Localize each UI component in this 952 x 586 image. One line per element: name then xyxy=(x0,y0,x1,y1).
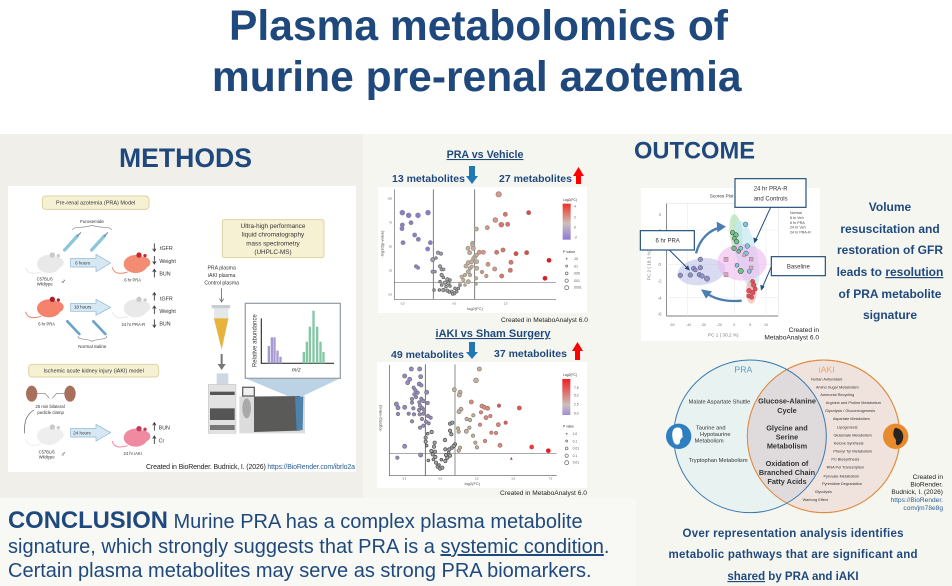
chart: volcano PRA vs Vehicle: 0.0 xyxy=(452,302,457,306)
chart: PCA scores plot: Normal xyxy=(790,211,802,215)
mouse row 2: 6 hr PRA xyxy=(38,321,55,326)
chart: PCA scores plot: PC 1 ( 30.2 %) xyxy=(708,333,739,338)
shared pathways: Glucose-Alanine xyxy=(758,397,816,406)
iAKI-only pathways: Amino Sugar Metabolism xyxy=(816,386,859,390)
iAKI-only pathways: Lipogenesis xyxy=(837,425,858,429)
chart: volcano iAKI vs Sham: Log2(FC) xyxy=(563,373,577,377)
chart: PCA scores plot: Scores Plot xyxy=(710,193,734,198)
text: volume resuscitation: signature xyxy=(863,308,917,322)
iAKI-only pathways: Ketone Synthesis xyxy=(834,442,864,446)
iAKI-only pathways: Glycolysis / Gluconeogenesis xyxy=(825,409,875,413)
mouse row 3 xyxy=(26,424,66,460)
UHPLC-MS label: mass spectrometry xyxy=(246,240,301,247)
readouts 1: Weight xyxy=(159,259,176,265)
chart: volcano iAKI vs Sham: log2(FC) xyxy=(465,481,481,486)
chart: volcano PRA vs Vehicle: 75 xyxy=(389,220,393,224)
readouts 2 xyxy=(153,293,176,328)
chart: volcano iAKI vs Sham: 0.01 xyxy=(573,447,579,451)
credit: MetaboAnalyst PCA xyxy=(764,327,819,342)
chart: PCA scores plot: -30 xyxy=(701,323,706,327)
chart: PCA scores plot: 5 xyxy=(749,323,751,327)
label: 49 metabolites down xyxy=(391,342,478,361)
iAKI-only pathways: Phenyl Tyr Metabolism xyxy=(833,450,872,454)
icon: mass spectrometer xyxy=(208,373,305,433)
arrow to instrument xyxy=(219,354,225,367)
mouse row 1: Wildtype xyxy=(37,282,53,287)
chart: volcano iAKI vs Sham: -2.5 xyxy=(402,477,407,481)
credit: MetaboAnalyst PCA: Created in xyxy=(789,327,819,334)
arrow: 18 hours xyxy=(71,299,111,315)
chart: volcano iAKI vs Sham xyxy=(377,362,587,488)
PRA model label: Pre-renal azotemia (PRA) Model xyxy=(56,201,135,207)
UHPLC-MS label: Ultra-high performance xyxy=(241,223,306,230)
chart: volcano iAKI vs Sham: 5.0 xyxy=(511,477,516,481)
chart: volcano PRA vs Vehicle: 0 xyxy=(574,225,576,229)
callout: 24 hr PRA-R and Controls: 24 hr PRA-R xyxy=(754,187,788,193)
mouse: 24 hr iAKI xyxy=(112,426,150,456)
chart: PCA scores plot: -50 xyxy=(669,323,675,327)
iAKI-only pathways: Arginine and Proline Metabolism xyxy=(826,401,881,405)
mouse row 1 xyxy=(26,252,66,287)
conclusion text: Certain plasma metabolites may serve as strong PRA biomarkers. xyxy=(8,560,592,582)
callout: 6 hr PRA xyxy=(640,231,694,271)
chart: PCA scores plot: PC 2 ( 18.3 %) xyxy=(647,249,652,280)
readouts 3: BUN xyxy=(159,426,170,432)
chart: volcano PRA vs Vehicle: P value xyxy=(563,250,575,254)
readouts 1: tGFR xyxy=(160,246,173,252)
credit: BioRender Venn: Created in xyxy=(913,474,943,481)
icon: orange kidney xyxy=(883,424,908,449)
PRA-only pathways: Metabolism xyxy=(695,439,724,445)
connector arrow xyxy=(25,410,34,433)
chart: PCA scores plot: -6 xyxy=(658,311,662,316)
icon: sample tube xyxy=(212,305,230,350)
text: volume resuscitation: of PRA metabolite xyxy=(839,287,942,301)
text: over representation: Over representation analysis identifies xyxy=(682,528,904,540)
chart: volcano PRA vs Vehicle: .001 xyxy=(573,279,580,283)
furosemide bracket: Furosemide xyxy=(80,219,104,224)
arrow: PRA to recovery xyxy=(696,227,722,253)
credit: MetaboAnalyst 1: Created in MetaboAnalyst 6.0 xyxy=(501,317,588,324)
readouts 2: BUN xyxy=(159,322,171,328)
iAKI-only pathways: Pyruvate Metabolism xyxy=(823,474,859,478)
mouse: 6 hr PRA: 6 hr PRA xyxy=(124,278,141,283)
chart: volcano PRA vs Vehicle: 4 xyxy=(574,204,576,208)
iAKI-only pathways: Glycolysis xyxy=(815,490,832,494)
iAKI-only pathways: Pyrimidine Degradation xyxy=(822,482,862,486)
arrow: 6 hours: 6 hours xyxy=(75,260,91,265)
chart: PCA scores plot: -2 xyxy=(658,279,662,284)
label: PRA: PRA xyxy=(734,364,752,374)
chart: volcano PRA vs Vehicle: .01 xyxy=(573,264,578,268)
icon: syringes top xyxy=(65,233,108,250)
chart: volcano iAKI vs Sham: 0.0 xyxy=(574,411,579,415)
PRA-only pathways: Taurine and xyxy=(696,426,726,432)
callout: Baseline xyxy=(760,257,825,291)
arrow: baseline to PRA xyxy=(707,293,742,301)
chart: volcano iAKI vs Sham: 0.1 xyxy=(573,454,577,458)
label: 13 metabolites down xyxy=(392,166,478,185)
chart: volcano iAKI vs Sham: 0.0 xyxy=(438,477,443,481)
callout: 24 hr PRA-R and Controls xyxy=(735,179,806,243)
icon: syringes saline xyxy=(67,321,105,334)
chart: PCA scores plot: 6 hr Veh xyxy=(790,216,804,220)
chart: volcano iAKI vs Sham: P value xyxy=(563,425,574,429)
chart: volcano iAKI vs Sham: 2.5 xyxy=(574,403,579,407)
readouts 2: Weight xyxy=(159,309,176,315)
readouts 3: Cr xyxy=(159,438,165,444)
PRA-only pathways xyxy=(689,400,750,464)
readouts 2: tGFR xyxy=(160,296,173,302)
PRA-only pathways: Malate Aspartate Shuttle xyxy=(689,400,750,406)
PRA-only pathways: Hypotaurine xyxy=(700,432,730,438)
chart: volcano PRA vs Vehicle: -2 xyxy=(574,236,577,240)
credit: BioRender Venn: BioRender. xyxy=(910,482,943,488)
text: over representation: metabolic pathways that are significant and xyxy=(668,549,918,561)
title: murine pre-renal azotemia xyxy=(212,53,743,101)
cycle arrows and callouts xyxy=(640,179,825,301)
readouts 1: BUN xyxy=(159,272,171,278)
iAKI model label: Ischemic acute kidney injury (iAKI) model xyxy=(44,369,144,375)
chart: volcano PRA vs Vehicle: 0.0 xyxy=(388,292,393,296)
shared pathways: Cycle xyxy=(777,406,797,415)
shared pathways: Glycine and xyxy=(766,424,808,433)
sample list xyxy=(204,266,239,286)
chart: PCA scores plot: -40 xyxy=(686,323,691,327)
icon: kidneys with clamps xyxy=(26,386,76,402)
UHPLC-MS label: (UHPLC-MS) xyxy=(254,249,292,256)
title: Plasma metabolomics of xyxy=(229,2,729,50)
shared pathways xyxy=(758,397,816,486)
chart: volcano PRA vs Vehicle: 25 xyxy=(389,268,393,272)
chart: volcano iAKI vs Sham: 7.5 xyxy=(574,386,579,390)
mouse: 24 hr PRA-R: 24 hr PRA-R xyxy=(122,322,145,327)
arrow: 18 hours: 18 hours xyxy=(74,305,92,310)
chart: PCA scores plot: 2 xyxy=(658,229,661,234)
conclusion text: CONCLUSION Murine PRA has a complex plasma metabolite xyxy=(8,507,583,534)
text: over representation xyxy=(668,528,918,583)
chart: Venn diagram xyxy=(666,360,908,513)
iAKI-only pathways: Glutamate Metabolism xyxy=(834,434,872,438)
chart: volcano PRA vs Vehicle: .005 xyxy=(573,272,580,276)
label: 37 metabolites up: 37 metabolites xyxy=(494,348,567,360)
arrow: 24 hours: 24 hours xyxy=(73,430,91,435)
chart: PCA scores plot: 4 xyxy=(658,212,661,217)
credit: BioRender Venn: https://BioRender. xyxy=(891,497,943,504)
panel: conclusion xyxy=(0,498,636,586)
heading: methods: METHODS xyxy=(119,143,252,173)
readouts 1 xyxy=(153,243,176,278)
mouse row 2 xyxy=(26,297,64,326)
callout: 24 hr PRA-R and Controls: and Controls xyxy=(754,197,788,203)
chart: volcano iAKI vs Sham: 0.01 xyxy=(573,461,579,465)
mouse row 3: ♂ xyxy=(60,450,66,459)
clamp text: pedicle clamp xyxy=(37,410,64,415)
label: iAKI: iAKI xyxy=(819,364,835,374)
iAKI-only pathways: Warburg Effect xyxy=(803,498,829,502)
chart: volcano iAKI vs Sham: 5.0 xyxy=(574,394,579,398)
label: 37 metabolites up xyxy=(494,342,583,360)
credit: BioRender Venn xyxy=(891,474,943,512)
heading: outcome: OUTCOME xyxy=(634,138,755,164)
chart: volcano PRA vs Vehicle: -log10(p-value) xyxy=(380,230,385,257)
text: volume resuscitation: resuscitation and xyxy=(840,222,940,236)
chart: volcano PRA vs Vehicle: Log2(FC) xyxy=(563,198,577,202)
chart: PCA scores plot: 24 hr Veh xyxy=(790,226,806,230)
chart: PCA scores plot: -4 xyxy=(658,295,662,300)
iAKI-only pathways: RNA Pol Transcription xyxy=(827,466,864,470)
panel: volcano plots xyxy=(377,149,588,497)
UHPLC-MS label xyxy=(222,220,324,258)
chart: volcano iAKI vs Sham: 2.5 xyxy=(475,477,479,481)
text: volume resuscitation: Volume xyxy=(869,200,912,214)
chart: volcano iAKI vs Sham: 7.5 xyxy=(548,477,553,481)
chart: volcano PRA vs Vehicle: 2 xyxy=(574,215,576,219)
heading: PRA vs Vehicle: PRA vs Vehicle xyxy=(447,149,523,161)
text: volume resuscitation: restoration of GFR xyxy=(837,243,943,257)
chart: volcano iAKI vs Sham: -log10(p-value) xyxy=(378,404,383,432)
callout: Baseline: Baseline xyxy=(787,264,810,270)
arrow to tube xyxy=(220,288,224,302)
conclusion text: signature, which strongly suggests that PRA is a systemic condition. xyxy=(8,536,609,558)
shared pathways: Oxidation of xyxy=(766,459,809,468)
chart: PCA scores plot: -20 xyxy=(717,323,722,327)
icon: blue kidney xyxy=(666,424,691,449)
iAKI-only pathways: PC Biosynthesis xyxy=(831,458,859,462)
label: 13 metabolites down: 13 metabolites xyxy=(392,173,465,185)
chart: volcano PRA vs Vehicle: 2.5 xyxy=(504,302,508,306)
sample list: PRA plasma xyxy=(207,266,236,272)
chart: PCA scores plot: 24 hr PRA-R xyxy=(790,231,811,235)
inset chart: mass spectrum: m/z xyxy=(292,367,301,373)
panel: methods xyxy=(0,134,363,498)
heading: iAKI vs Sham Surgery: iAKI vs Sham Surgery xyxy=(436,328,551,340)
PRA model label xyxy=(42,196,149,209)
furosemide bracket xyxy=(73,219,111,230)
mouse row 1: ♂ xyxy=(60,277,66,286)
chart: volcano PRA vs Vehicle: .0001 xyxy=(573,286,582,290)
text: volume resuscitation xyxy=(837,200,943,322)
chart: volcano PRA vs Vehicle: log2(FC) xyxy=(467,306,483,311)
conclusion text xyxy=(8,507,609,582)
chart: PCA scores plot xyxy=(641,188,820,341)
iAKI-only pathways xyxy=(803,377,881,502)
panel: outcome xyxy=(634,138,943,583)
chart: volcano PRA vs Vehicle: -2.5 xyxy=(400,302,405,306)
mouse: 6 hr PRA xyxy=(112,252,150,283)
sample list: iAKI plasma xyxy=(208,273,236,279)
credit: BioRender methods: Created in BioRender. Budnick, I. (2026) https://BioRender.com/ibrlo2a xyxy=(146,464,355,471)
iAKI model label xyxy=(29,364,159,377)
chart: volcano PRA vs Vehicle: 100 xyxy=(388,196,393,200)
chart: volcano PRA vs Vehicle: .10 xyxy=(573,257,578,261)
UHPLC-MS label: liquid chromatography xyxy=(242,232,305,239)
arrow: 6 hours xyxy=(71,254,111,272)
PRA-only pathways: Tryptophan Metabolism xyxy=(689,458,748,464)
shared pathways: Branched Chain xyxy=(759,468,816,477)
chart: volcano iAKI vs Sham: 1.0 xyxy=(573,432,577,436)
label: 27 metabolites up: 27 metabolites xyxy=(499,173,572,185)
mouse row 3: Wildtype xyxy=(39,455,55,460)
text: over representation: shared by PRA and iAKI xyxy=(727,571,859,583)
iAKI-only pathways: Ammonia Recycling xyxy=(820,393,854,397)
chart: PCA scores plot: 6 hr PRA xyxy=(790,221,805,225)
chart: PCA scores plot: 10 xyxy=(764,323,768,327)
mouse row 1: C57BL/6 xyxy=(37,277,53,282)
projection beam xyxy=(245,378,340,397)
panel: page background xyxy=(0,134,952,586)
figure: study design xyxy=(8,186,356,472)
chart: PCA scores plot: 0 xyxy=(658,262,661,267)
readouts 3 xyxy=(153,423,170,444)
chart: PCA scores plot: 0 xyxy=(733,323,735,327)
iAKI-only pathways: Aspartate Metabolism xyxy=(833,417,870,421)
label: 27 metabolites up xyxy=(499,167,584,185)
credit: BioRender Venn: com/jm78e8g xyxy=(903,505,943,512)
inset chart: mass spectrum xyxy=(245,303,340,378)
mouse: 24 hr PRA-R xyxy=(112,297,150,327)
title xyxy=(212,2,743,101)
shared pathways: Serine xyxy=(776,433,798,442)
shared pathways: Metabolism xyxy=(767,441,808,450)
saline bracket xyxy=(78,336,107,349)
arrow: 24 hours xyxy=(71,424,111,441)
chart: volcano iAKI vs Sham: 0.1 xyxy=(573,439,577,443)
mouse row 3: C57BL/6 xyxy=(39,449,55,454)
credit: BioRender Venn: Budnick, I. (2026) xyxy=(891,489,943,496)
credit: MetaboAnalyst 2: Created in MetaboAnalyst 6.0 xyxy=(500,490,587,497)
chart: volcano PRA vs Vehicle xyxy=(378,187,587,313)
clamp text xyxy=(35,404,65,415)
callout: 6 hr PRA: 6 hr PRA xyxy=(656,239,680,245)
clamp text: 25 min bilateral xyxy=(35,404,65,409)
iAKI-only pathways: Nortan Antioxidant xyxy=(811,377,843,381)
label: 49 metabolites down: 49 metabolites xyxy=(391,349,464,361)
shared pathways: Fatty Acids xyxy=(767,477,807,486)
text: volume resuscitation: leads to resolution xyxy=(837,265,943,279)
chart: volcano PRA vs Vehicle: 50 xyxy=(389,244,393,248)
mouse: 24 hr iAKI: 24 hr iAKI xyxy=(124,451,142,456)
credit: MetaboAnalyst PCA: MetaboAnalyst 6.0 xyxy=(764,334,819,342)
saline bracket: Normal Saline xyxy=(78,344,107,349)
sample list: Control plasma xyxy=(204,280,239,286)
inset chart: mass spectrum: Relative abundance xyxy=(253,314,259,367)
